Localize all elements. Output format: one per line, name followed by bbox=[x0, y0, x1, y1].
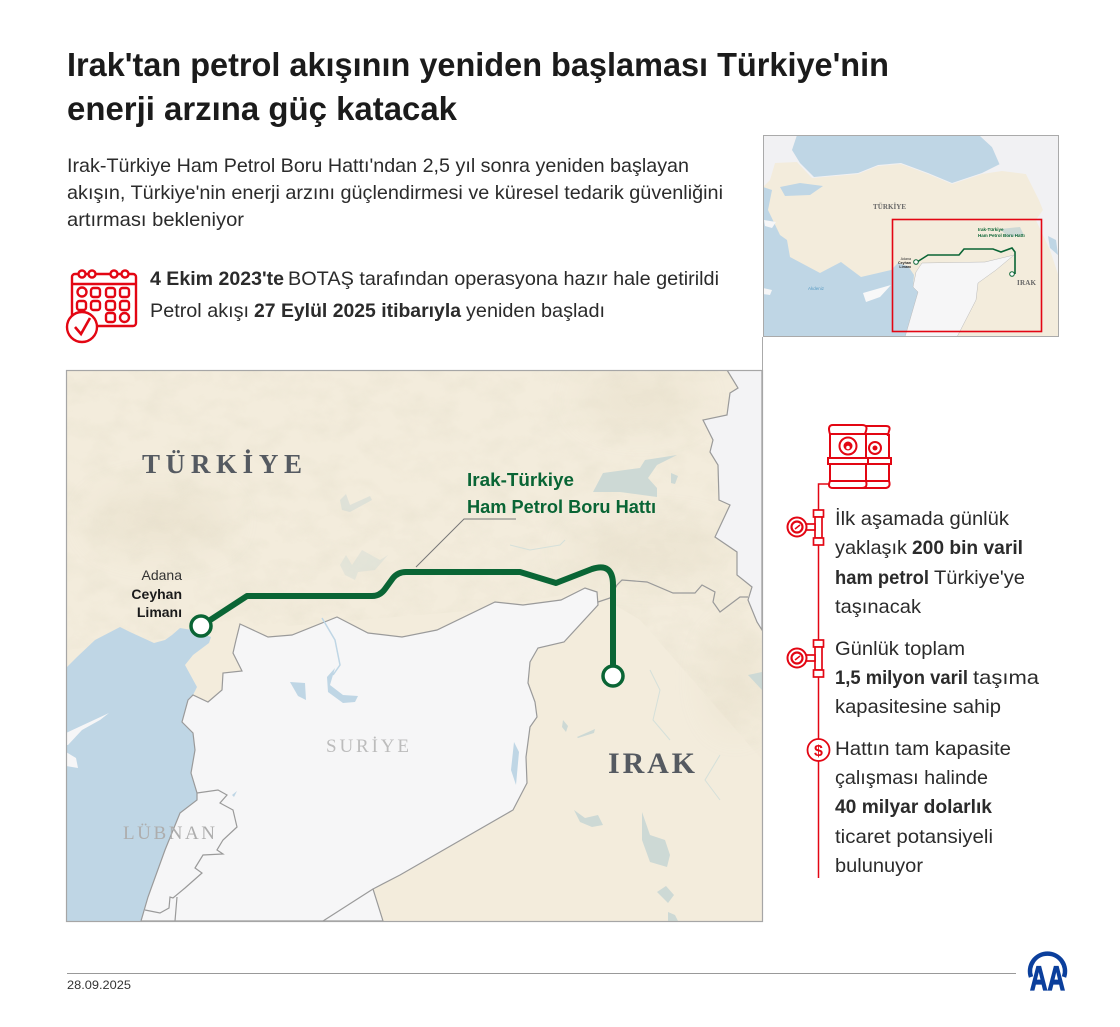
title: Irak'tan petrol akışının yeniden başlaması Türkiye'nin bbox=[67, 46, 889, 83]
mini map pipeline bbox=[917, 248, 1015, 274]
mini map labels bbox=[808, 203, 1037, 291]
side text: total capacity bbox=[835, 638, 1039, 718]
side text: trade potential: çalışması halinde bbox=[835, 767, 988, 789]
intro text: akışın, Türkiye'nin enerji arzını güçlendirmesi ve küresel tedarik güvenliğini bbox=[67, 182, 723, 204]
side text: trade potential: Hattın tam kapasite bbox=[835, 738, 1011, 760]
port label bbox=[131, 567, 182, 620]
side text: first stage: 200 bin varil bbox=[912, 537, 1023, 559]
intro text: Irak-Türkiye Ham Petrol Boru Hattı'ndan 2,5 yıl sonra yeniden başlayan bbox=[67, 155, 689, 177]
side text: trade potential: ticaret potansiyeli bbox=[835, 826, 993, 848]
icon: calendar with check bbox=[67, 270, 136, 342]
pipeline route bbox=[191, 567, 623, 686]
country labels: LÜBNAN bbox=[123, 823, 215, 844]
intro text bbox=[67, 155, 723, 231]
mini map labels: Ceyhan bbox=[898, 261, 911, 265]
side text: first stage: yaklaşık bbox=[835, 537, 907, 559]
side text: total capacity: 1,5 milyon varil bbox=[835, 667, 968, 689]
pipeline label: Ham Petrol Boru Hattı bbox=[467, 496, 656, 517]
key dates text: 4 Ekim 2023'te bbox=[150, 268, 284, 290]
Iran region bbox=[703, 370, 762, 630]
sea bbox=[66, 627, 211, 921]
side text: first stage bbox=[835, 507, 1025, 618]
key dates text: Petrol akışı bbox=[150, 300, 249, 322]
side text: trade potential bbox=[835, 738, 1011, 877]
borders bbox=[145, 580, 748, 921]
logo: AA: AA bbox=[1030, 960, 1065, 998]
side text: trade potential: 40 milyar dolarlık bbox=[835, 796, 992, 818]
key dates text bbox=[150, 268, 719, 322]
logo: AA bbox=[1030, 954, 1065, 998]
country labels: IRAK bbox=[608, 747, 696, 780]
pipeline label: Irak-Türkiye bbox=[467, 469, 574, 490]
Cyprus bbox=[66, 713, 109, 745]
side text: total capacity: Günlük toplam bbox=[835, 638, 965, 660]
icon: dollar: $ bbox=[814, 743, 823, 760]
side text: first stage: İlk aşamada günlük bbox=[835, 507, 1009, 530]
locator map bbox=[763, 135, 1059, 337]
main map bbox=[66, 370, 762, 921]
mini map labels: Adana bbox=[901, 257, 911, 261]
pipeline leader line bbox=[416, 519, 516, 567]
country labels bbox=[123, 449, 696, 844]
port label: Limanı bbox=[137, 604, 182, 620]
port label: Ceyhan bbox=[131, 586, 182, 602]
key dates text: yeniden başladı bbox=[466, 300, 605, 322]
icon: dollar bbox=[808, 739, 830, 761]
mini map labels: Irak-Türkiye bbox=[978, 227, 1004, 232]
side text: trade potential: bulunuyor bbox=[835, 855, 924, 877]
mini map labels: TÜRKİYE bbox=[873, 203, 906, 211]
title: enerji arzına güç katacak bbox=[67, 90, 458, 127]
port label: Adana bbox=[142, 567, 182, 583]
pipeline label bbox=[467, 469, 656, 517]
country labels: TÜRKİYE bbox=[142, 449, 302, 479]
key dates text: 27 Eylül 2025 itibarıyla bbox=[254, 300, 461, 322]
side text: first stage: taşınacak bbox=[835, 596, 921, 618]
icon: pressure gauge 2 bbox=[788, 640, 824, 677]
side text: total capacity: kapasitesine sahip bbox=[835, 696, 1001, 718]
lakes and rivers bbox=[340, 455, 762, 921]
mini map labels: Akdeniz bbox=[808, 286, 825, 291]
key dates text: BOTAŞ tarafından operasyona hazır hale getirildi bbox=[288, 268, 719, 290]
Syria, Lebanon and Jordan bbox=[141, 588, 598, 921]
side text: first stage: Türkiye'ye bbox=[934, 567, 1025, 589]
icon: pressure gauge 1 bbox=[788, 510, 824, 545]
date: 28.09.2025 bbox=[67, 978, 131, 992]
intro text: artırması bekleniyor bbox=[67, 209, 245, 231]
locator frame and highlight box bbox=[762, 136, 1058, 370]
main map frame bbox=[66, 370, 762, 922]
side text: first stage: ham petrol bbox=[835, 567, 929, 589]
red pipeline line bbox=[818, 484, 829, 878]
title bbox=[67, 46, 889, 127]
mini map labels: IRAK bbox=[1017, 279, 1037, 287]
icon: oil barrels bbox=[828, 425, 891, 488]
side text: total capacity: taşıma bbox=[973, 667, 1039, 689]
mini map labels: Limanı bbox=[899, 265, 911, 269]
mini map labels: Ham Petrol Boru Hattı bbox=[978, 233, 1025, 238]
country labels: SURİYE bbox=[326, 736, 409, 757]
